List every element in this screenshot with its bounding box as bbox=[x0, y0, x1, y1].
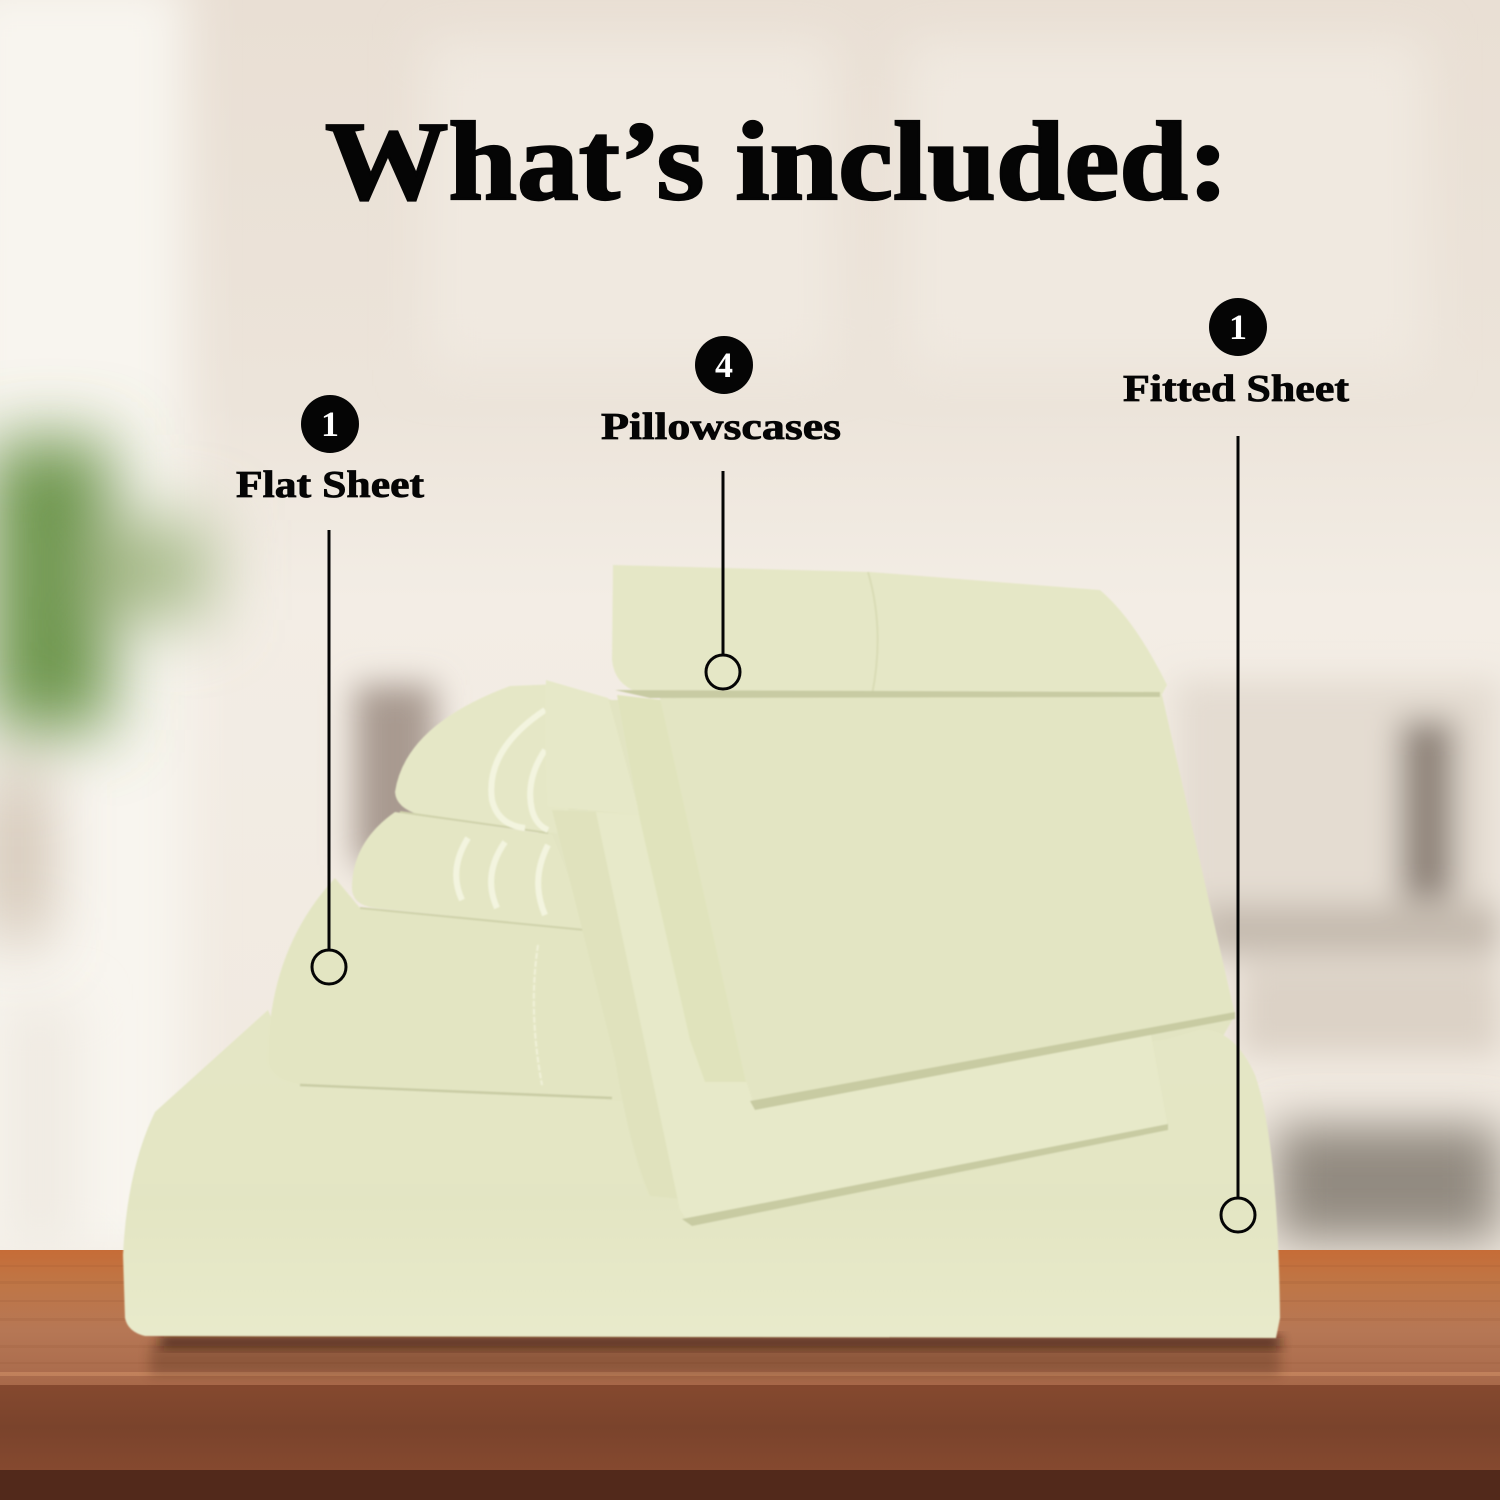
callout: pillowcases: Pillowscases bbox=[601, 406, 841, 448]
callout: fitted sheet: Fitted Sheet bbox=[1123, 368, 1349, 410]
sheet set stack bbox=[123, 565, 1280, 1338]
stack base: fills gaps between layers bbox=[300, 684, 1235, 1226]
callout: flat sheet bbox=[236, 395, 424, 984]
pillowcase: top fold bbox=[612, 565, 1167, 698]
pillowcase: hanging right bbox=[617, 695, 750, 1082]
title: What’s included: bbox=[325, 100, 1229, 224]
callout: pillowcases: 4 bbox=[715, 345, 733, 385]
callout: flat sheet: 1 bbox=[321, 404, 339, 444]
flat sheet bbox=[268, 878, 640, 1102]
fitted sheet (bottom layer) bbox=[123, 1010, 1280, 1338]
callout: fitted sheet bbox=[1123, 298, 1349, 1232]
table: wood surface and edge bbox=[0, 1250, 1500, 1500]
callout: fitted sheet: 1 bbox=[1229, 307, 1247, 347]
callout: flat sheet: Flat Sheet bbox=[236, 464, 424, 506]
rear pillowcases with pleats bbox=[395, 684, 570, 835]
pillowcase: hanging left bbox=[545, 680, 640, 815]
callout: pillowcases bbox=[601, 336, 841, 689]
